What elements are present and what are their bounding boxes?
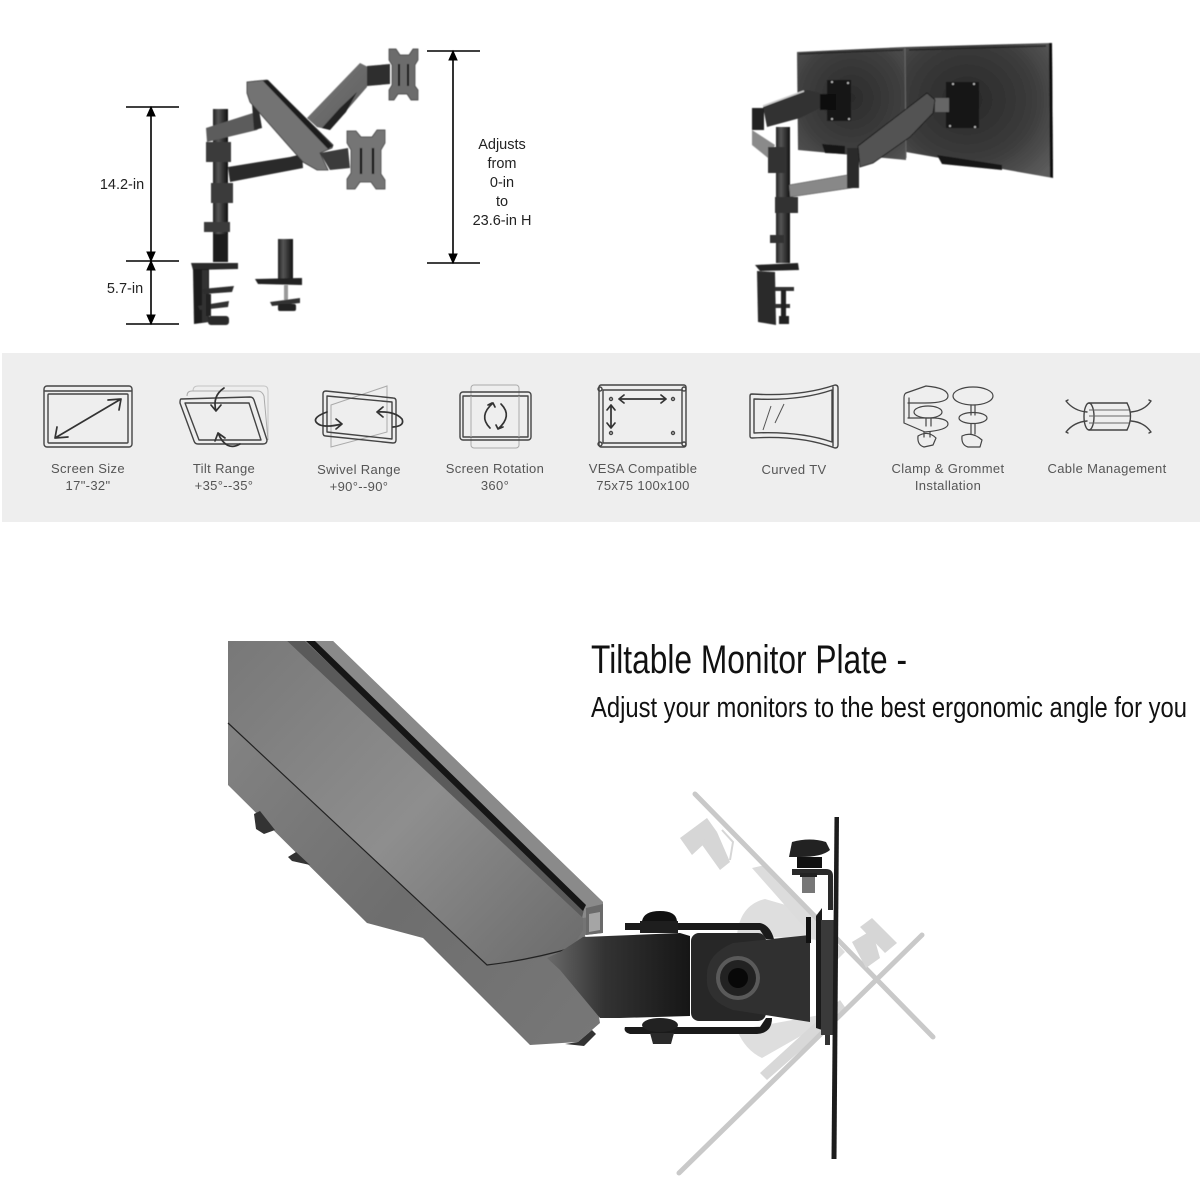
top knob [642, 911, 677, 921]
icon: clamp and grommet [904, 386, 993, 447]
icon: screen rotation [460, 385, 531, 448]
upper joint [367, 64, 390, 86]
pole collars [770, 197, 798, 243]
label: tilt range: Tilt Range [193, 461, 255, 476]
icon: screen size [44, 386, 132, 447]
ghost upper knob [680, 818, 733, 870]
pole [776, 127, 790, 263]
label: clamp and grommet [892, 461, 1004, 493]
arm end notch [586, 904, 603, 935]
label: clamp and grommet: Installation [915, 478, 981, 493]
underside shadow [565, 1030, 596, 1046]
lower arm [228, 154, 303, 182]
label: swivel range [317, 462, 401, 494]
dimension: height adjustment: from [488, 156, 516, 172]
label: screen size: 17"-32" [66, 478, 110, 493]
arm black groove [306, 641, 586, 911]
panel: feature strip [2, 353, 1200, 522]
product photo: dual monitors on arm [752, 43, 1053, 325]
ghost plates [679, 794, 933, 1173]
teardrop bracket [707, 935, 810, 1022]
dimension: 5.7-in [107, 261, 179, 324]
pole [213, 109, 228, 261]
icon: cable management [1066, 400, 1151, 433]
label: screen rotation [446, 461, 544, 493]
right VESA bracket [935, 82, 979, 128]
right monitor [905, 43, 1053, 178]
right gas arm [858, 93, 935, 167]
label: tilt range: +35°--35° [195, 478, 253, 493]
upper monitor arm [307, 63, 368, 130]
lower VESA plate [347, 130, 385, 189]
arm inner band [287, 641, 585, 918]
label: VESA compatible: VESA Compatible [589, 461, 697, 476]
dimension: height adjustment: 0-in [490, 175, 514, 191]
product close-up: gas spring arm [228, 641, 690, 1046]
ghost bracket lower [760, 1000, 847, 1080]
label: screen size: Screen Size [51, 461, 125, 476]
bottom link [625, 1018, 772, 1034]
elbow post [847, 148, 859, 188]
arm main face [228, 641, 583, 965]
upper VESA plate [389, 49, 418, 100]
thumb screw [789, 840, 830, 893]
label: swivel range: +90°--90° [330, 479, 388, 494]
label: cable management: Cable Management [1047, 461, 1167, 476]
arm end recess [589, 912, 600, 932]
pivot block [691, 933, 766, 1021]
dimension: 14.2-in [100, 107, 179, 261]
label: screen rotation: 360° [481, 478, 509, 493]
left VESA bracket [820, 80, 851, 121]
arm top edge [263, 80, 333, 149]
icon: swivel range [315, 386, 403, 447]
top link [625, 923, 774, 939]
dimension: 14.2-in: 14.2-in [100, 177, 144, 193]
label: tilt range [193, 461, 255, 493]
lock bolt [716, 956, 760, 1000]
dimension: height adjustment [427, 51, 531, 263]
gas spring arm [247, 80, 333, 170]
monitor right edge [1049, 43, 1053, 178]
connector [547, 933, 690, 1018]
mount plate [806, 817, 839, 1159]
monitor stand recesses [822, 144, 1002, 170]
underside tab [254, 811, 275, 834]
grommet mount [255, 239, 302, 311]
upper left elbow [752, 108, 785, 173]
arm lower shell [228, 641, 603, 1045]
dimension: height adjustment: to [496, 194, 508, 210]
arm seam [228, 723, 575, 965]
upper left gas arm [763, 90, 820, 127]
desk clamp [191, 263, 238, 325]
underside tab [288, 852, 310, 865]
monitor seam [905, 48, 906, 158]
monitor top lines [799, 46, 1046, 54]
base arm [206, 104, 262, 142]
ghost bracket upper [752, 865, 845, 962]
clamp [755, 263, 799, 325]
label: swivel range: Swivel Range [317, 462, 401, 477]
dimension: height adjustment: Adjusts [478, 137, 526, 153]
L bracket [792, 869, 833, 910]
arm top facet [228, 641, 603, 918]
heading: Tiltable Monitor Plate - [591, 638, 907, 682]
left monitor [797, 47, 906, 160]
dimension: 5.7-in: 5.7-in [107, 281, 143, 297]
dimension: height adjustment: 23.6-in H [473, 213, 531, 229]
label: VESA compatible: 75x75 100x100 [596, 478, 690, 493]
ghost disc bottom [737, 1015, 820, 1058]
product photo: mount with dimension callouts [191, 49, 418, 325]
label: clamp and grommet: Clamp & Grommet [892, 461, 1004, 476]
label: VESA compatible [589, 461, 697, 493]
ghost right knob [852, 918, 897, 968]
ghost disc top [737, 899, 820, 940]
product close-up: tilt joint [625, 817, 839, 1159]
icon: curved TV [750, 385, 838, 448]
label: screen rotation: Screen Rotation [446, 461, 544, 476]
lower arm [789, 175, 858, 197]
label: curved TV: Curved TV [761, 462, 827, 477]
icon: VESA compatible [598, 385, 686, 447]
bottom washer and bolt [642, 1018, 678, 1044]
lower joint [320, 148, 350, 170]
product close-up: tilt ghost positions [679, 794, 933, 1173]
icon: tilt range [180, 386, 268, 446]
pole collars [204, 142, 233, 262]
label: screen size [51, 461, 125, 493]
